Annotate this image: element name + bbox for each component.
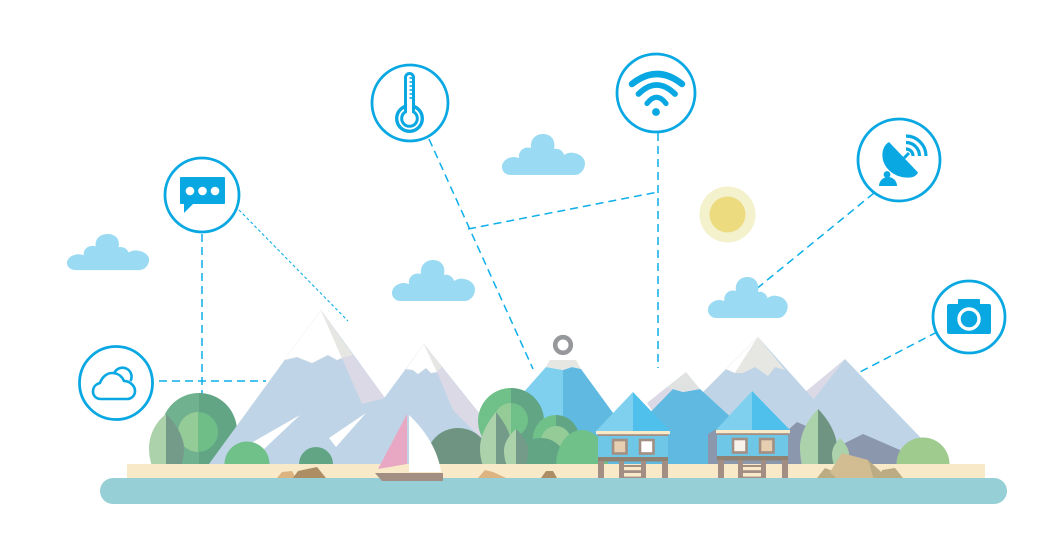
centre leaf tree — [480, 412, 512, 466]
stilt house left — [596, 392, 670, 478]
left tree — [161, 393, 237, 469]
sailboat — [375, 414, 443, 481]
light green hill — [896, 438, 950, 490]
green centre hill — [556, 430, 608, 500]
small right leaf — [832, 438, 849, 466]
teal hill — [299, 447, 333, 481]
blue mountain — [600, 372, 782, 464]
second round tree — [533, 415, 579, 461]
landscape — [100, 310, 1007, 504]
dashed connector lines — [159, 133, 937, 394]
icon: weather cloud — [80, 346, 152, 420]
cloud: right — [708, 277, 788, 318]
icon: wifi — [617, 54, 695, 132]
second snowy mountain — [340, 344, 525, 464]
sun — [700, 186, 756, 242]
mid-right snowy mountain — [660, 337, 850, 464]
big snowy mountain — [209, 310, 500, 464]
teal centre hill — [515, 438, 567, 492]
snow streaks — [253, 413, 366, 450]
icon: camera — [933, 281, 1005, 353]
right mountain — [770, 359, 946, 464]
sand strip — [127, 464, 985, 478]
icon: satellite dish — [858, 119, 940, 201]
volcano smoke ring — [555, 337, 571, 353]
rocks — [277, 453, 903, 478]
stilt house right — [716, 391, 790, 478]
cloud: centre low — [392, 260, 475, 301]
right leaf tree — [800, 409, 837, 466]
purple slope behind blue mountain — [647, 387, 673, 415]
dark violet ridge — [708, 422, 905, 464]
cloud: far left — [67, 234, 149, 270]
dark hill — [426, 428, 490, 492]
left leaf tree — [149, 414, 184, 466]
volcano — [460, 360, 640, 464]
small leaf tree — [504, 429, 528, 466]
icon: thermometer — [372, 65, 448, 141]
green hill — [224, 442, 270, 486]
icon: chat bubble — [165, 158, 239, 232]
centre round tree — [478, 388, 544, 454]
water strip — [100, 478, 1007, 504]
cloud: top centre — [502, 134, 585, 175]
